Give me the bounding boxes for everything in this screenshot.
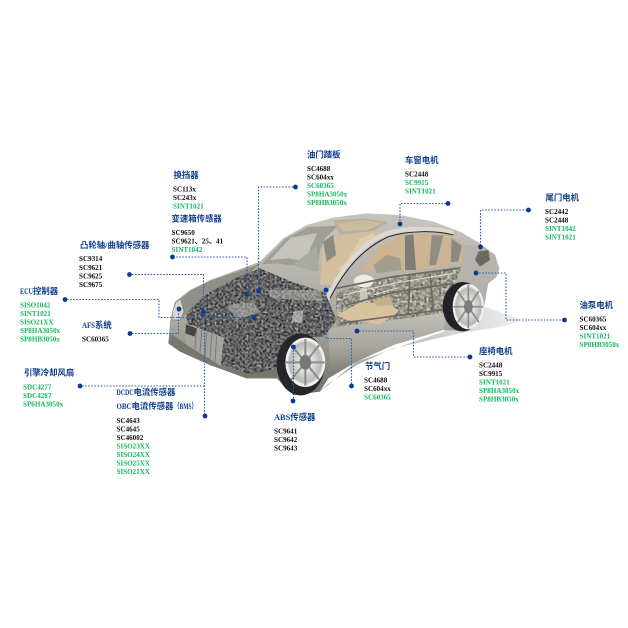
front seat — [337, 302, 398, 324]
label: 油泵电机 — [580, 300, 620, 349]
label: 油泵电机: SC604xx — [580, 324, 607, 332]
pillar arc — [327, 229, 453, 300]
label: ECU控制器: SISO1042 — [20, 302, 51, 310]
ground shadow — [320, 305, 522, 392]
connector: AFS — [128, 307, 181, 336]
label: ECU控制器: SISO21XX — [20, 318, 54, 326]
label: 节气门: SC604xx — [364, 385, 391, 393]
label: 座椅电机: SP8HA3050x — [479, 387, 520, 395]
connector: ABS — [291, 345, 296, 403]
label: 油门踏板 — [307, 150, 348, 207]
label: 油门踏板: SP8HA3050x — [307, 190, 348, 198]
label: 车窗电机: 车窗电机 — [405, 155, 439, 165]
label: DCDC and OBC current sensors: OBC — [116, 402, 132, 411]
label: 变速箱传感器: SC9650 — [172, 229, 195, 237]
radiator grille — [184, 322, 224, 366]
label: 变速箱传感器: 变速箱传感器 — [172, 214, 222, 224]
label: AFS系统: AFS — [82, 321, 95, 330]
label: 引擎冷却风扇: 引擎冷却风扇 — [24, 368, 74, 378]
label: 车窗电机 — [405, 155, 439, 196]
label: 尾门电机: SC2448 — [545, 216, 569, 224]
label: 换挡器: SC113x — [173, 186, 196, 194]
label: ABS传感器 — [274, 412, 316, 452]
label: 凸轮轴/曲轴传感器: SC9625 — [79, 272, 103, 280]
car body — [168, 213, 499, 395]
label: DCDC and OBC current sensors: SC4643 — [116, 417, 140, 425]
label: 节气门: SC4688 — [364, 376, 388, 384]
label: 油泵电机: SC60365 — [580, 316, 607, 324]
label: 节气门: SC60365 — [364, 394, 391, 402]
label: 油门踏板: 油门踏板 — [307, 150, 341, 160]
connector: 变速箱 — [170, 255, 249, 296]
connector: 节气门 — [324, 288, 354, 388]
connector: 引擎冷却风扇 and DCDC — [78, 314, 207, 418]
label: 座椅电机: SC9915 — [479, 370, 503, 378]
label: DCDC and OBC current sensors: 电流传感器 — [132, 401, 174, 411]
label: 车窗电机: SC2448 — [405, 170, 429, 178]
front cabin — [320, 232, 383, 285]
label: 变速箱传感器: SC9621、25、41 — [172, 238, 224, 246]
label: 车窗电机: SINT1021 — [405, 188, 436, 196]
connector: 凸轮轴 — [127, 272, 206, 314]
label: ECU控制器: 控制器 — [33, 286, 59, 296]
label: 换挡器: SC243x — [173, 194, 197, 202]
engine bay — [183, 265, 340, 377]
windshield — [262, 226, 338, 272]
label: 引擎冷却风扇: SDC4287 — [23, 392, 52, 400]
label: 油门踏板: SC4688 — [307, 165, 331, 173]
connector: 座椅电机 — [355, 329, 472, 359]
label: 凸轮轴/曲轴传感器 — [79, 240, 150, 289]
label: 座椅电机 — [479, 346, 520, 404]
label: 车窗电机: SC9915 — [405, 179, 429, 187]
label: 换挡器: 换挡器 — [174, 170, 199, 180]
label: ECU控制器: SP8HB3050x — [20, 336, 60, 344]
headlight — [172, 299, 184, 320]
label: 节气门 — [364, 361, 391, 402]
label: 换挡器: SINT1021 — [173, 202, 204, 210]
label: ABS传感器: SC9643 — [274, 444, 298, 452]
label: 引擎冷却风扇 — [23, 368, 74, 408]
label: 油门踏板: SC60365 — [307, 182, 334, 190]
label: ECU控制器 — [20, 286, 61, 344]
label: DCDC and OBC current sensors: SC46002 — [116, 434, 144, 442]
rear quarter — [460, 244, 499, 283]
label: ECU控制器: SINT1021 — [20, 310, 51, 318]
sunroof — [333, 218, 388, 234]
connector: 油门踏板 — [256, 185, 298, 293]
label: ABS传感器: SC9641 — [274, 428, 298, 436]
label: ABS传感器: SC9642 — [274, 436, 298, 444]
label: 尾门电机: SINT1042 — [545, 225, 576, 233]
connector: 油泵电机 — [474, 271, 567, 322]
label: 座椅电机: SINT1021 — [479, 378, 510, 386]
rear wheel — [443, 282, 484, 331]
connector: ECU — [63, 297, 256, 320]
connector: 车窗电机 — [398, 201, 450, 226]
label: 尾门电机: SC2442 — [545, 208, 569, 216]
rear windows — [362, 233, 464, 272]
label: DCDC and OBC current sensors: 电流传感器 — [134, 387, 176, 397]
connector: 尾门电机 — [478, 208, 531, 249]
car illustration — [168, 213, 522, 395]
label: ECU控制器: ECU — [20, 287, 33, 296]
label: 节气门: 节气门 — [365, 361, 390, 371]
lower door — [328, 312, 448, 375]
label: 引擎冷却风扇: SDC4277 — [23, 384, 52, 392]
label: 换挡器 — [173, 170, 204, 210]
label: 凸轮轴/曲轴传感器: SC9621 — [79, 264, 103, 272]
label: 凸轮轴/曲轴传感器: SC9675 — [79, 281, 103, 289]
label: ECU控制器: SP8HA3050x — [20, 327, 61, 335]
label: 变速箱传感器 — [172, 214, 224, 254]
label: 尾门电机: SINT1021 — [545, 234, 576, 242]
label: AFS系统: 系统 — [95, 320, 112, 330]
label: 油泵电机: 油泵电机 — [580, 300, 614, 310]
label: ABS传感器: ABS传感器 — [274, 412, 316, 422]
label: DCDC and OBC current sensors: DCDC — [116, 388, 134, 397]
chassis tubes — [337, 268, 458, 323]
label: 变速箱传感器: SINT1042 — [172, 246, 203, 254]
label: 凸轮轴/曲轴传感器: SC9314 — [79, 255, 103, 263]
label: DCDC and OBC current sensors — [116, 387, 197, 476]
label: 座椅电机: SP8HB3050x — [479, 396, 519, 404]
label: AFS系统: SC60365 — [82, 336, 109, 344]
label: DCDC and OBC current sensors: SISO21XX — [116, 468, 151, 476]
chassis and interior mechanics — [333, 265, 463, 328]
label: 油泵电机: SP8HB3050x — [580, 341, 620, 349]
label: 凸轮轴/曲轴传感器: 凸轮轴/曲轴传感器 — [80, 240, 150, 250]
label: DCDC and OBC current sensors: （BMS） — [174, 401, 197, 411]
label: 油泵电机: SINT1021 — [580, 332, 611, 340]
hood — [175, 264, 260, 320]
front bumper lip — [168, 333, 278, 378]
label: DCDC and OBC current sensors: SISO23XX — [116, 442, 151, 450]
front wheel — [277, 333, 325, 395]
label: 引擎冷却风扇: SP6HA3050x — [23, 400, 64, 408]
label: DCDC and OBC current sensors: SISO25XX — [116, 460, 151, 468]
label: AFS系统 — [82, 320, 112, 344]
label: DCDC and OBC current sensors: SC4645 — [116, 426, 140, 434]
label: 座椅电机: 座椅电机 — [479, 346, 513, 356]
label: 油门踏板: SP8HB3050x — [307, 199, 347, 207]
label: 油门踏板: SC604xx — [307, 174, 334, 182]
label: 尾门电机 — [545, 192, 580, 242]
label: 尾门电机: 尾门电机 — [546, 192, 580, 202]
label: 座椅电机: SC2448 — [479, 362, 503, 370]
label: DCDC and OBC current sensors: SISO24XX — [116, 451, 151, 459]
